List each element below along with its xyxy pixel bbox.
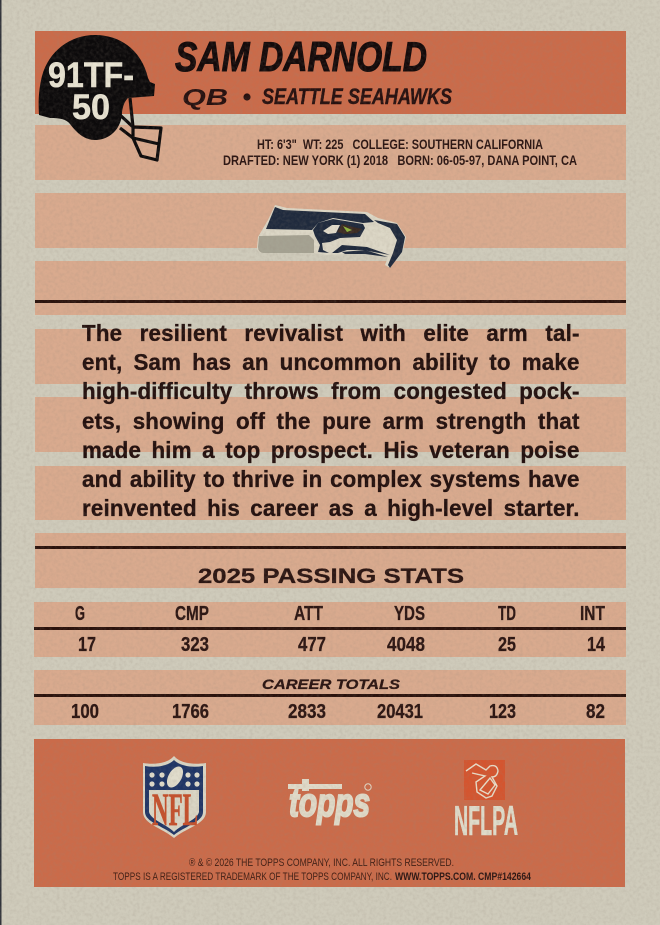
season stat values: 17	[78, 634, 96, 656]
position: QB	[182, 84, 228, 110]
separator bullet	[243, 93, 251, 101]
season stat values	[78, 634, 606, 656]
biography text block: ets, showing off the pure arm strength that	[82, 408, 580, 434]
season stat values: 25	[498, 634, 516, 656]
legal line two: TOPPS IS A REGISTERED TRADEMARK OF THE TOPPS COMPANY, INC.	[113, 871, 392, 883]
career stat values: 123	[489, 701, 516, 723]
career stat values: 2833	[288, 701, 326, 723]
panel: bio info band	[35, 125, 626, 180]
panel: career stats band	[34, 670, 626, 725]
panel: footer band	[34, 739, 625, 887]
website and code: WWW.TOPPS.COM. CMP#142664	[395, 871, 532, 883]
season stat values: 14	[587, 634, 606, 656]
panel: season stats band	[34, 602, 626, 657]
panel: text band one	[35, 329, 626, 384]
season stat headers: INT	[580, 603, 605, 625]
icon: football helmet with card number	[39, 35, 161, 160]
season stat headers: CMP	[175, 603, 209, 625]
panel: name header band	[35, 31, 626, 114]
career stat values: 20431	[377, 701, 423, 723]
panel: stats title band	[35, 533, 626, 588]
stats title: 2025 PASSING STATS	[198, 565, 464, 588]
biography text block	[82, 320, 580, 522]
player name: SAM DARNOLD	[175, 33, 427, 80]
biography text block: made him a top prospect. His veteran poise	[82, 437, 580, 463]
career stat values: 100	[71, 701, 99, 723]
bio line one: HT: 6'3" WT: 225 COLLEGE: SOUTHERN CALIFORNIA	[257, 136, 543, 152]
biography text block: high-difficulty throws from congested pock-	[82, 378, 580, 404]
panel: text band three	[35, 466, 626, 520]
season stat values: 477	[298, 634, 326, 656]
season stat headers	[75, 603, 605, 625]
panel: text band two	[35, 397, 626, 452]
team name: SEATTLE SEAHAWKS	[262, 84, 452, 109]
panel: lower logo band	[35, 261, 626, 315]
biography text block: reinvented his career as a high-level starter.	[82, 495, 580, 521]
season stat headers: YDS	[394, 603, 425, 625]
icon: NFL shield	[143, 756, 206, 838]
season stat headers: TD	[498, 603, 516, 625]
card number: 91TF-	[48, 56, 134, 95]
season stat headers: G	[75, 603, 85, 625]
career stat values: 82	[586, 701, 605, 723]
panel: logo band	[35, 193, 626, 248]
icon: NFL shield: NFL	[152, 784, 198, 836]
career totals heading: CAREER TOTALS	[262, 677, 400, 692]
icon: NFLPA logo	[454, 760, 518, 844]
legal line one: ® & © 2026 THE TOPPS COMPANY, INC. ALL RIGHTS RESERVED.	[189, 857, 454, 869]
bio line two: DRAFTED: NEW YORK (1) 2018 BORN: 06-05-97, DANA POINT, CA	[223, 152, 577, 168]
text: NFLPA	[454, 797, 518, 844]
biography text block: and ability to thrive in complex systems have	[82, 466, 580, 492]
icon: Topps logo: topps	[289, 781, 370, 825]
season stat headers: ATT	[294, 603, 323, 625]
card number second line: 50	[72, 88, 110, 127]
career stat values: 1766	[172, 701, 209, 723]
icon: Seattle Seahawks logo	[257, 205, 406, 268]
biography text block: ent, Sam has an uncommon ability to make	[82, 349, 580, 375]
biography text block: The resilient revivalist with elite arm tal-	[82, 320, 580, 346]
season stat values: 323	[181, 634, 209, 656]
career stat values	[71, 701, 605, 723]
season stat values: 4048	[387, 634, 425, 656]
